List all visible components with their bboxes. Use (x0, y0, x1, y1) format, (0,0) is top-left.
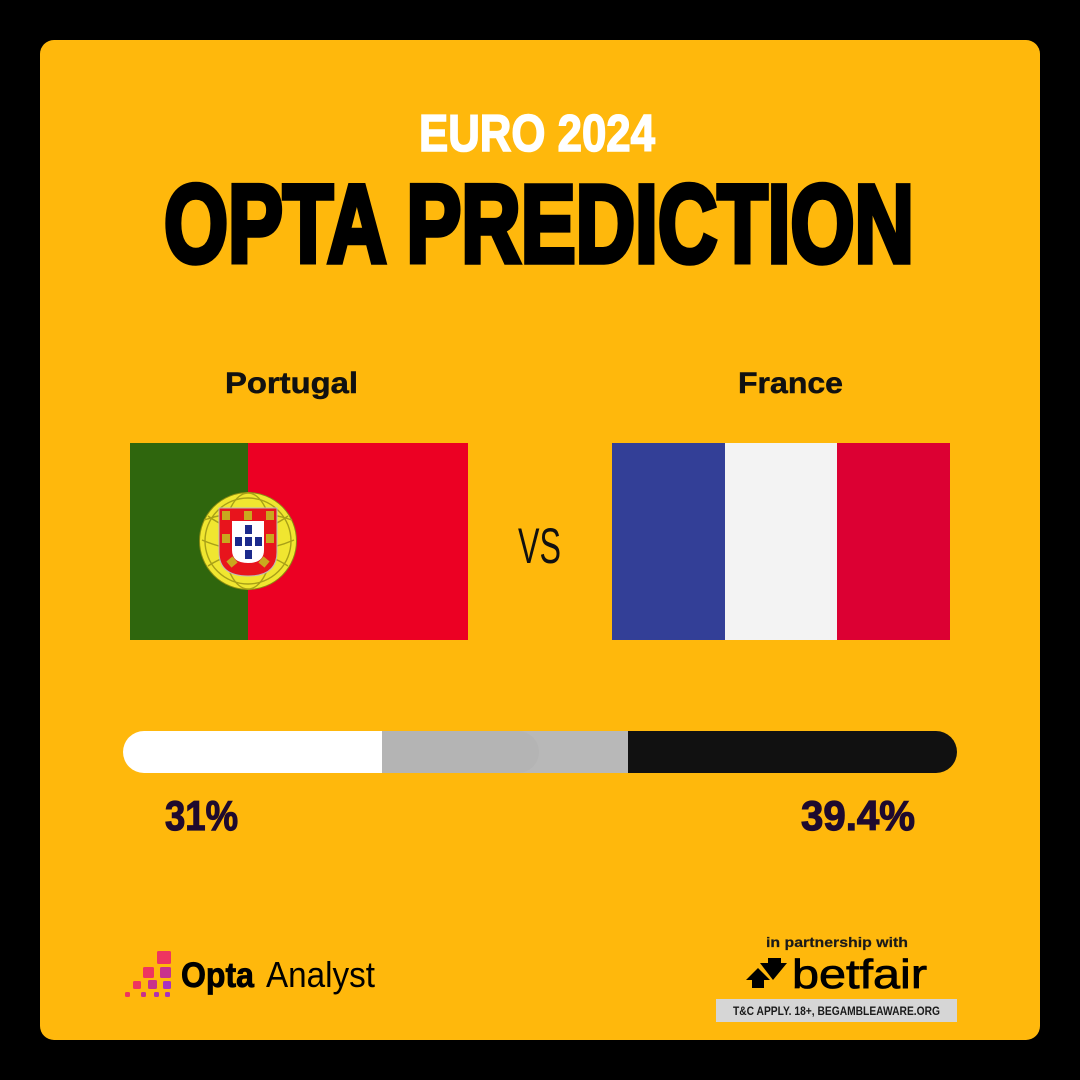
versus label: VS (518, 518, 561, 574)
heading: Euro 2024: EURO 2024 (419, 105, 655, 163)
flag: France (612, 443, 950, 640)
disclaimer box (716, 999, 957, 1022)
disclaimer box: T&C APPLY. 18+, BEGAMBLEAWARE.ORG (733, 1004, 940, 1018)
sponsor: in partnership with: in partnership with (766, 934, 908, 950)
value: Portugal win 31%: 31% (165, 792, 238, 839)
value: France win 39.4%: 39.4% (801, 792, 915, 839)
icon: Opta stepped squares (125, 951, 171, 997)
logo: Opta Analyst: Analyst (266, 954, 375, 995)
logo: betfair (746, 951, 927, 997)
team name: France: France (738, 367, 843, 400)
probability bar (123, 731, 957, 773)
logo: Opta Analyst (125, 951, 375, 997)
logo: betfair: betfair (792, 951, 927, 997)
team name: Portugal: Portugal (225, 367, 358, 400)
emblem: armillary sphere and shield (200, 492, 296, 590)
icon: betfair arrows (746, 958, 787, 988)
logo: Opta Analyst: Opta (181, 956, 254, 995)
flag: Portugal (130, 443, 468, 640)
